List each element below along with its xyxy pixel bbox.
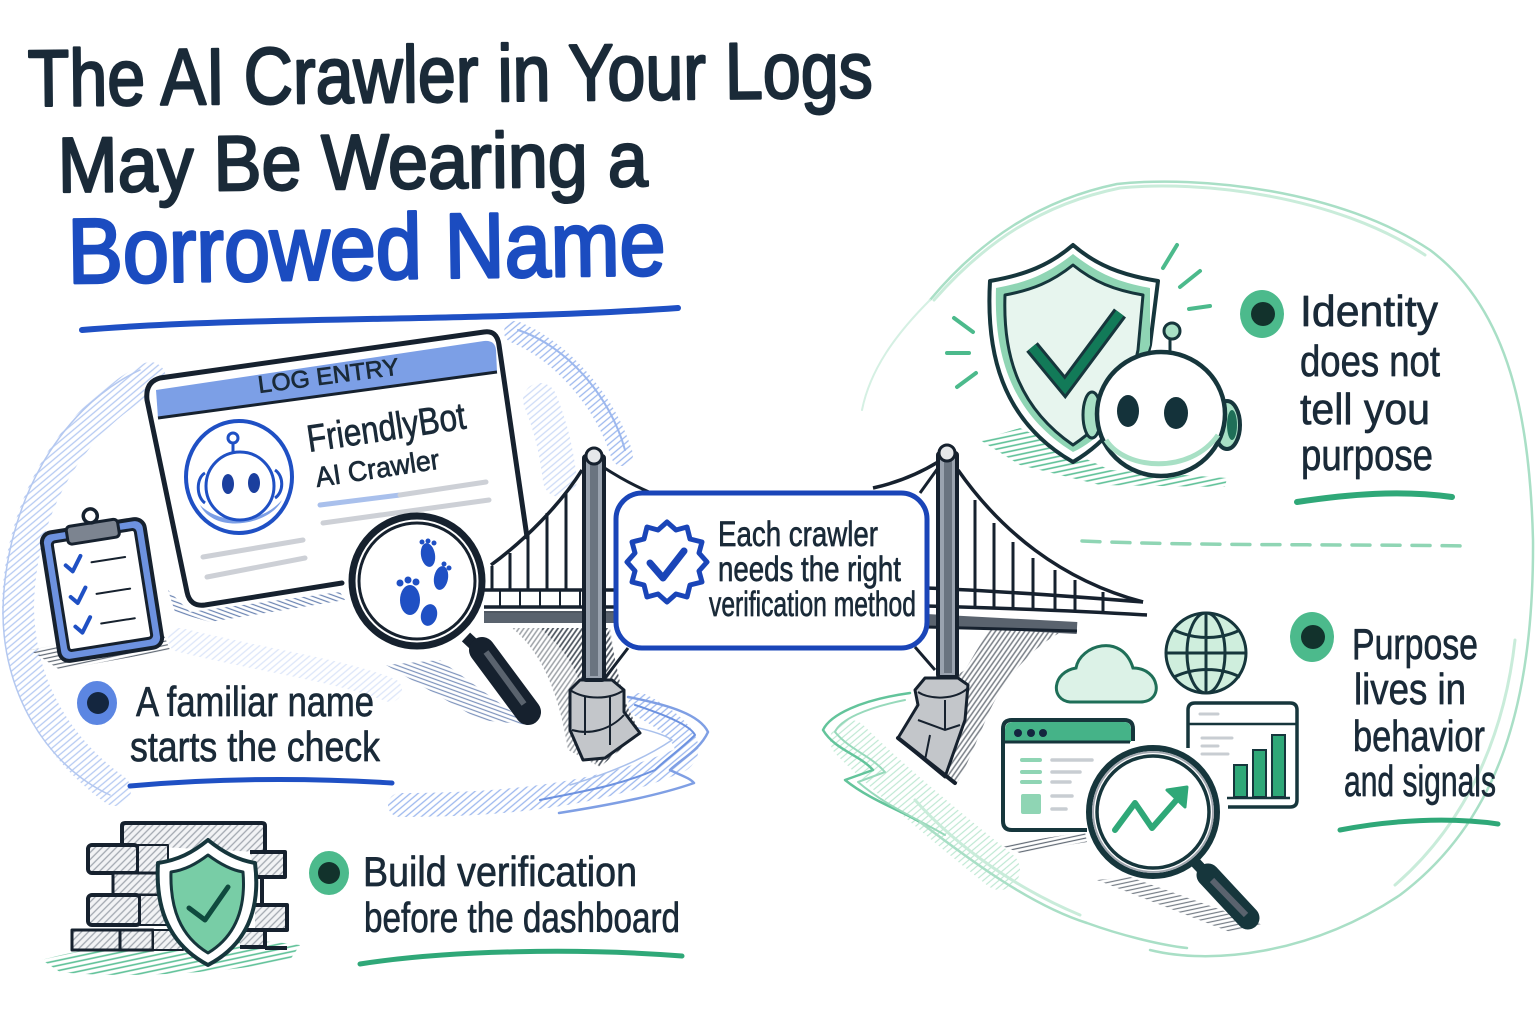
text: familiar name: A familiar name [136,678,374,725]
robot [1083,323,1240,476]
text: callout: Each crawler [718,515,878,554]
magnifier shadow right [1097,877,1263,932]
text: purpose [1344,620,1496,806]
text: identity [1300,287,1440,480]
text: purpose: lives in [1354,665,1466,714]
suspension cables [491,462,1143,678]
log subtitle: AI Crawler [313,444,442,493]
icon: globe [1166,613,1246,693]
underline: identity [1297,493,1452,502]
text: familiar name [130,678,381,770]
bridge deck [484,588,1147,631]
icon: cloud [1056,646,1156,702]
text: purpose: Purpose [1352,620,1478,669]
river: blue [400,697,708,813]
bridge [484,445,1147,783]
icon: verification badge [627,522,707,602]
browser shadow [1000,832,1087,853]
icon: magnifier with trend [1089,748,1248,918]
bullet: blue [77,681,117,725]
title: Borrowed Name [67,193,666,303]
right tower [938,445,957,677]
text: build verification [363,848,680,941]
icon: bar chart [1188,703,1297,807]
panel: blue wash background [3,330,625,795]
title [27,25,873,303]
text: identity: purpose [1301,431,1433,480]
underline: build verification [360,951,682,964]
icon: brick wall with shield [42,823,300,975]
bullet: green [309,851,349,895]
underline: familiar name [130,780,392,786]
icon: clipboard [30,501,170,670]
text: callout [709,515,916,624]
panel: green outline [862,182,1533,956]
text: purpose: behavior [1353,712,1485,761]
log entry window [147,332,527,605]
underline: purpose [1340,820,1498,830]
left rock [512,628,640,767]
title: May Be Wearing a [57,115,649,209]
title underline [82,308,678,330]
icon: magnifier with footprints [352,516,528,712]
panel: verification callout [616,493,927,648]
bullet: purpose [1290,612,1334,662]
text: identity: does not [1300,337,1440,386]
bullet: identity [1240,290,1284,338]
text: build verification: before the dashboard [364,894,680,941]
divider [1082,541,1465,546]
window shadow [168,590,345,622]
green river [823,693,1187,948]
right rock [898,628,1070,783]
text: identity: tell you [1300,385,1430,434]
text: identity: Identity [1300,287,1438,336]
text: familiar name: starts the check [130,723,381,770]
log entry label: LOG ENTRY [256,354,401,399]
icon: robot avatar [186,421,292,533]
magnifier shadow [386,660,530,725]
icon: browser window [1003,720,1133,830]
text: callout: verification method [709,585,916,624]
text: callout: needs the right [718,550,901,589]
title: The AI Crawler in Your Logs [27,25,873,123]
icon: shield and robot [947,245,1240,487]
text: build verification: Build verification [363,848,637,895]
log name: FriendlyBot [304,396,469,461]
left tower [584,448,604,680]
